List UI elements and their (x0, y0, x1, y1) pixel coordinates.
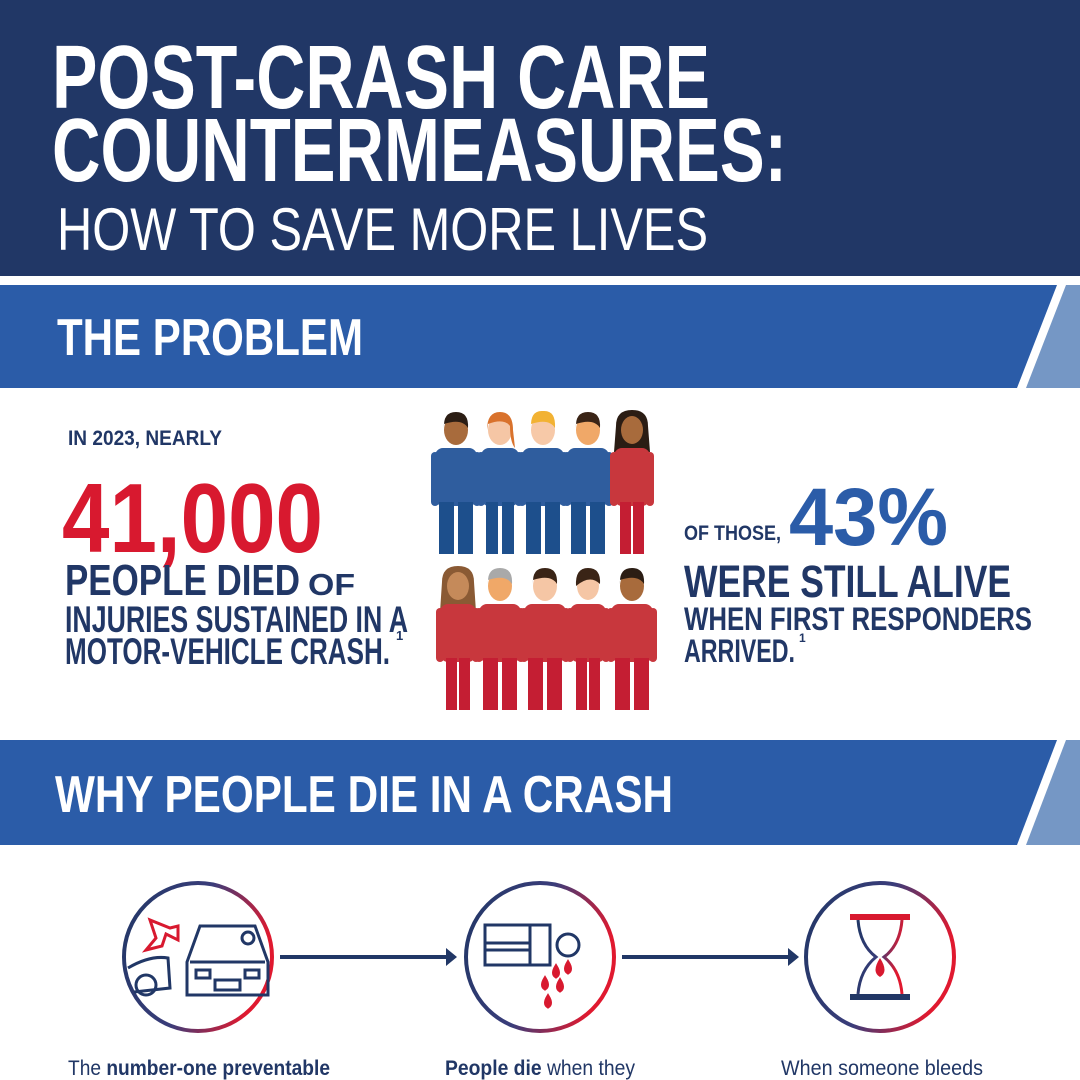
band: the problem: THE PROBLEM (57, 309, 363, 367)
captions: When someone bleeds (781, 1057, 983, 1080)
title: POST-CRASH CARE (52, 28, 710, 128)
icon: crash circle (124, 883, 272, 1031)
header (0, 0, 1080, 276)
stat: 41,000 died: MOTOR-VEHICLE CRASH. (65, 631, 390, 672)
icon: bleeding person circle (466, 883, 614, 1031)
band: why people die: WHY PEOPLE DIE IN A CRASH (55, 766, 673, 824)
band: the problem (0, 285, 1080, 388)
arrow 1 (280, 948, 457, 966)
stat: 43% alive: 1 (799, 631, 806, 645)
stat: 41,000 died: PEOPLE DIED (65, 556, 300, 605)
stat: 43% alive: OF THOSE, (684, 522, 781, 545)
band: why people die (0, 740, 1080, 845)
stat: 41,000 died: INJURIES SUSTAINED IN A (65, 599, 408, 640)
stat: 41,000 died (62, 427, 408, 672)
title: COUNTERMEASURES: (52, 101, 787, 201)
stat: 41,000 died: 1 (396, 628, 403, 643)
captions: The number-one preventable (68, 1057, 330, 1080)
stat: 41,000 died: IN 2023, NEARLY (68, 427, 222, 450)
title (52, 28, 787, 263)
stat: 43% alive (684, 472, 1032, 669)
stat: 43% alive: 43% (789, 472, 948, 563)
stat: 43% alive: ARRIVED. (684, 633, 795, 669)
captions (68, 1057, 983, 1080)
stat: 41,000 died: 41,000 (62, 463, 323, 573)
title: HOW TO SAVE MORE LIVES (57, 196, 708, 263)
arrow 2 (622, 948, 799, 966)
stat: 41,000 died: OF (308, 567, 355, 602)
captions: People die when they (445, 1057, 635, 1080)
people illustration (431, 410, 657, 710)
icon: hourglass circle (806, 883, 954, 1031)
